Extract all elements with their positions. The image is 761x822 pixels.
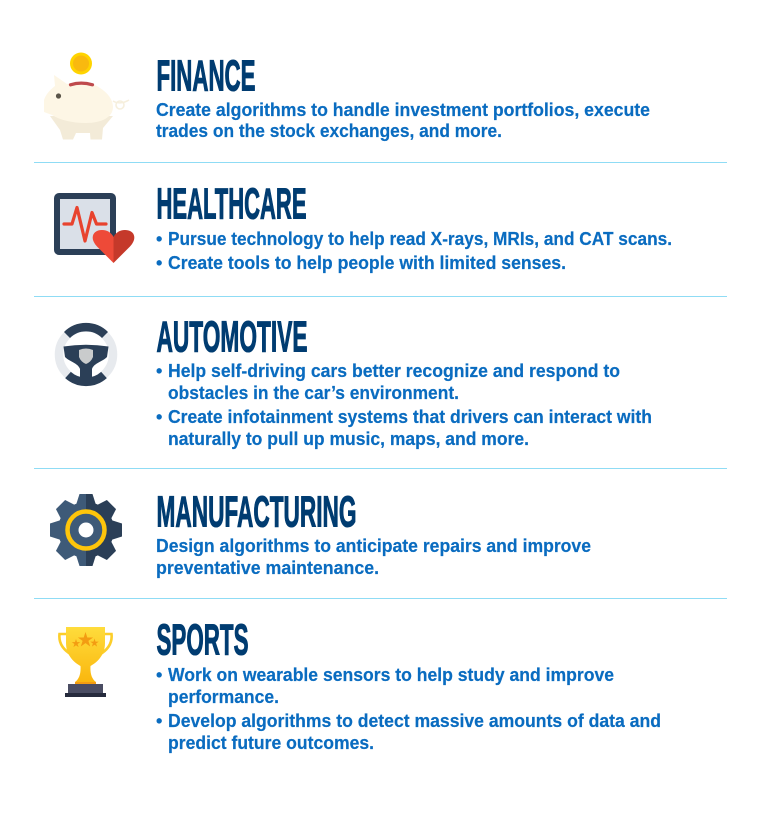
text: finance description: Create algorithms to handle investment portfolios, execute — [156, 100, 650, 120]
text: automotive bullets: naturally to pull up music, maps, and more. — [168, 429, 529, 449]
icon: heart monitor — [54, 193, 134, 263]
text: sports bullets: • — [156, 711, 162, 731]
panel: finance — [44, 52, 650, 141]
text: sports bullets — [156, 665, 661, 753]
text: manufacturing description: Design algorithms to anticipate repairs and improve — [156, 536, 591, 556]
text: manufacturing description: preventative maintenance. — [156, 558, 379, 578]
heading: manufacturing: MANUFACTURING — [156, 488, 356, 536]
heading: automotive: AUTOMOTIVE — [156, 312, 308, 362]
text: finance description: trades on the stock exchanges, and more. — [156, 121, 502, 141]
text: healthcare bullets — [156, 229, 672, 273]
text: sports bullets: Develop algorithms to detect massive amounts of data and — [168, 711, 661, 731]
icon: steering wheel — [59, 327, 113, 382]
text: sports bullets: Work on wearable sensors to help study and improve — [168, 665, 614, 685]
text: finance description — [156, 100, 650, 141]
icon: gear — [50, 494, 122, 566]
text: automotive bullets: obstacles in the car’s environment. — [168, 383, 459, 403]
text: healthcare bullets: Pursue technology to help read X-rays, MRIs, and CAT scans. — [168, 229, 672, 249]
heading: healthcare: HEALTHCARE — [156, 180, 306, 228]
text: automotive bullets: • — [156, 407, 162, 427]
panel: manufacturing — [50, 488, 591, 578]
heading: sports: SPORTS — [156, 616, 248, 664]
text: automotive bullets: Help self-driving cars better recognize and respond to — [168, 361, 620, 381]
text: sports bullets: performance. — [168, 687, 279, 707]
icon: trophy — [59, 627, 112, 697]
text: healthcare bullets: Create tools to help people with limited senses. — [168, 253, 566, 273]
text: sports bullets: predict future outcomes. — [168, 733, 374, 753]
panel: sports — [59, 616, 661, 753]
text: manufacturing description — [156, 536, 591, 578]
panel: automotive — [59, 312, 652, 449]
text: automotive bullets: Create infotainment systems that drivers can interact with — [168, 407, 652, 427]
text: sports bullets: • — [156, 665, 162, 685]
heading: finance: FINANCE — [156, 52, 256, 100]
text: automotive bullets — [156, 361, 652, 449]
panel: healthcare — [54, 180, 672, 273]
text: healthcare bullets: • — [156, 229, 162, 249]
text: healthcare bullets: • — [156, 253, 162, 273]
text: automotive bullets: • — [156, 361, 162, 381]
icon: piggy bank — [44, 52, 129, 140]
